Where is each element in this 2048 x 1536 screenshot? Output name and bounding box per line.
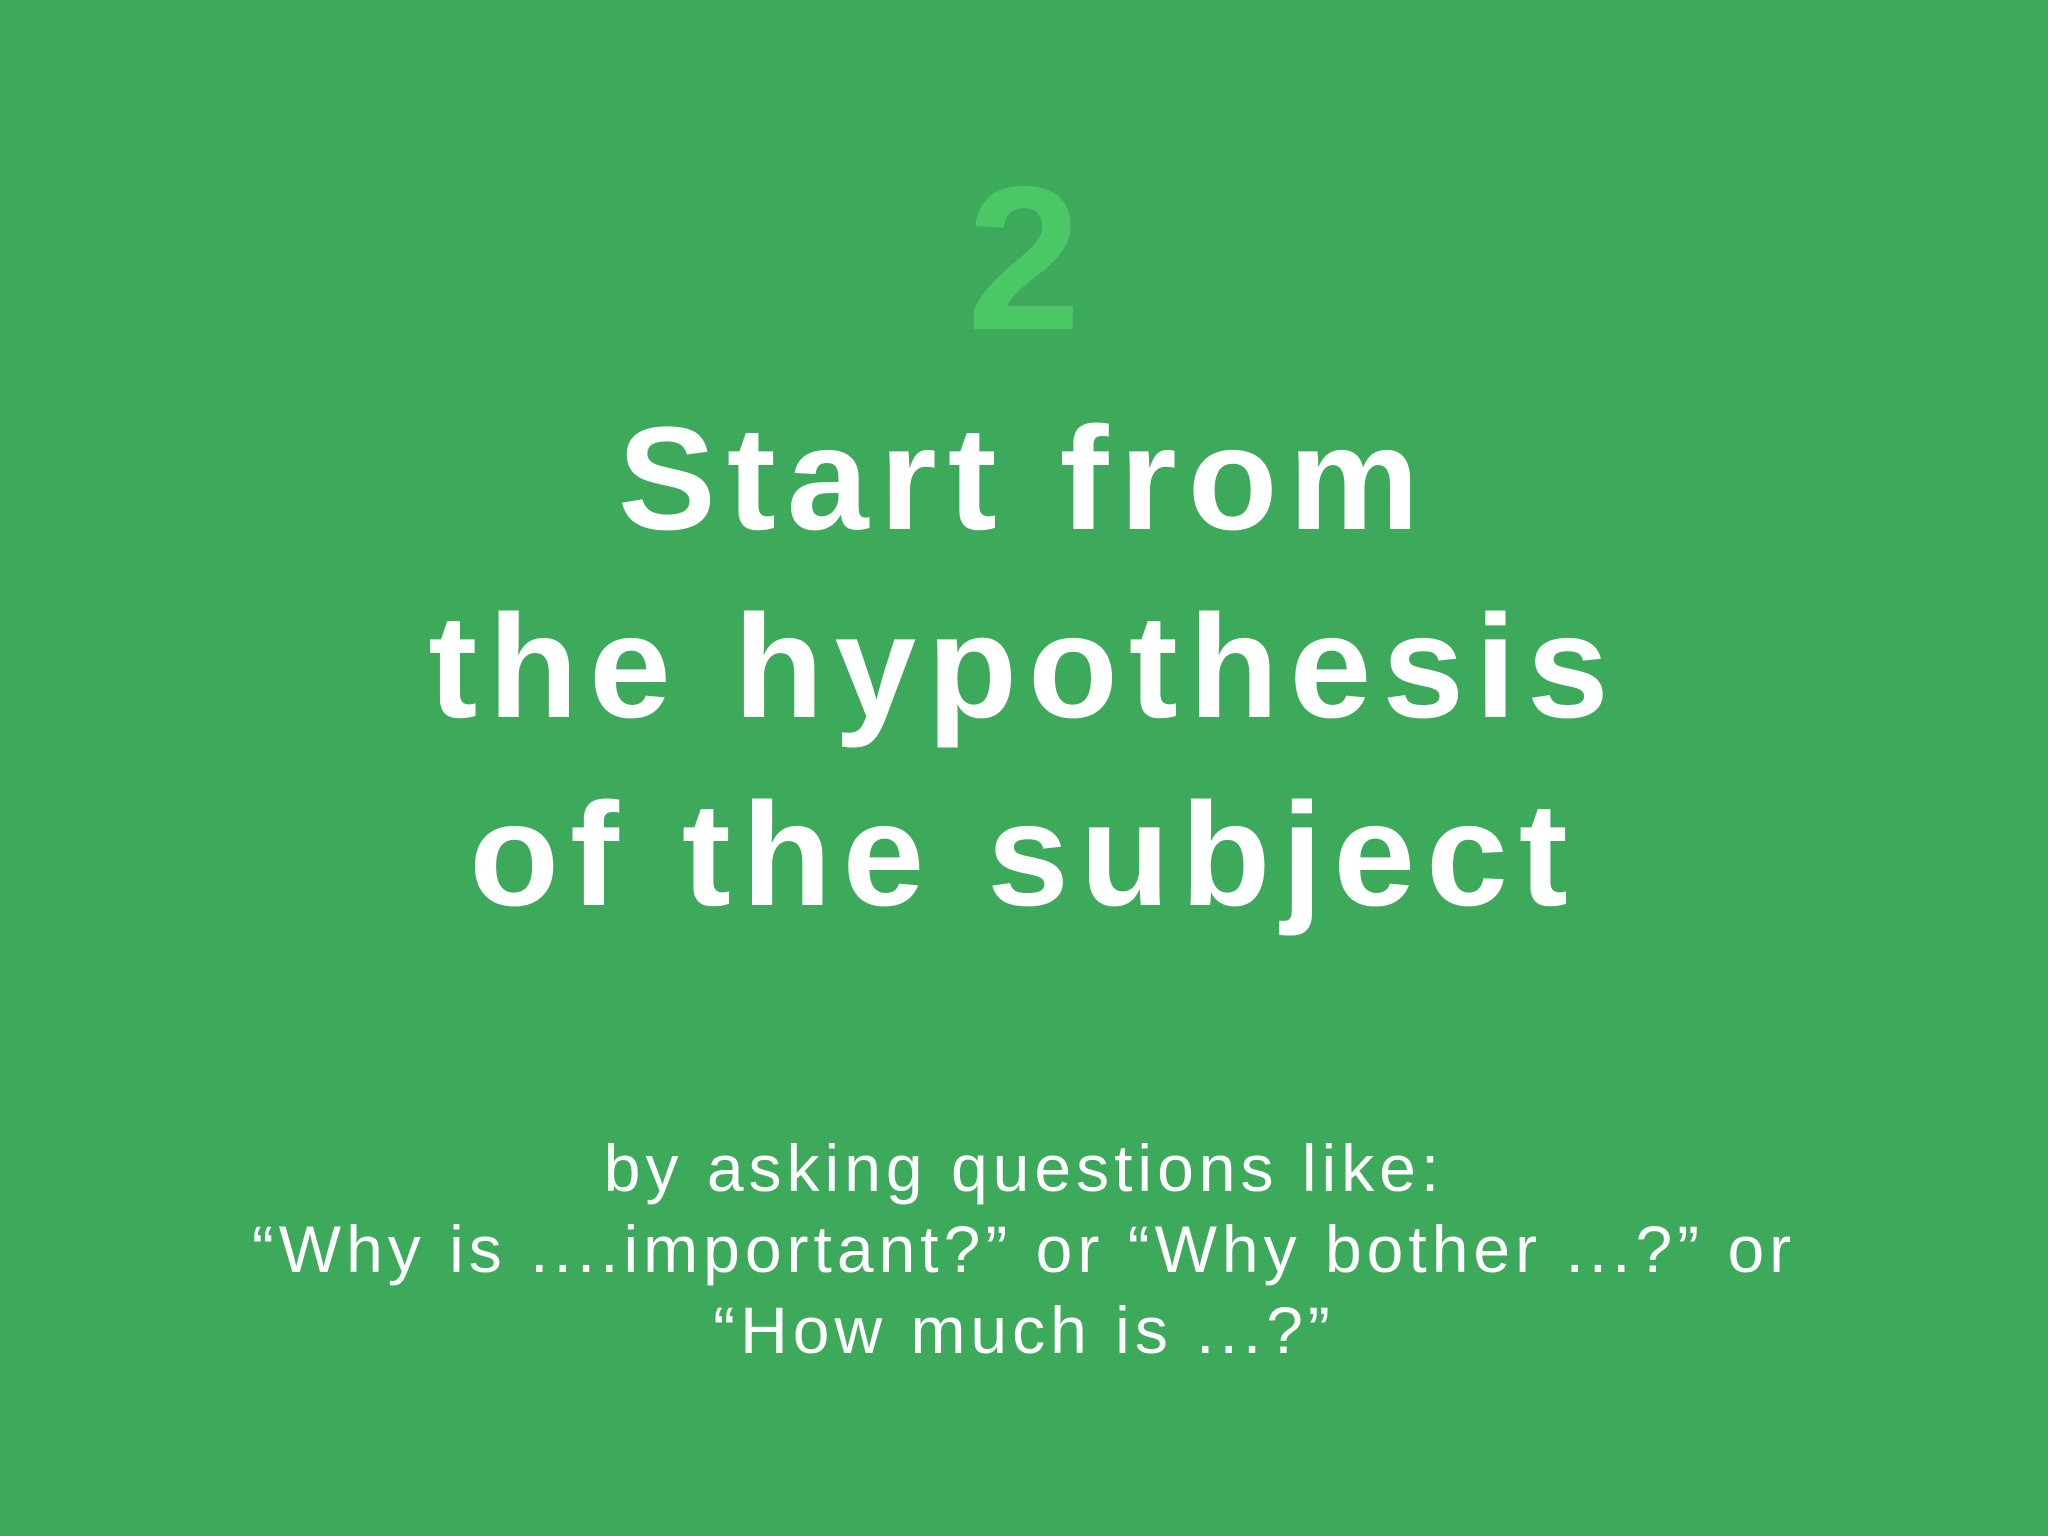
subtitle text: “How much is ...?” xyxy=(713,1293,1335,1367)
subtitle text: by asking questions like: xyxy=(604,1131,1444,1205)
subtitle text xyxy=(252,1131,1796,1367)
title: Start from xyxy=(618,397,1430,561)
title xyxy=(428,397,1620,937)
step number: 2 xyxy=(967,144,1081,373)
title: of the subject xyxy=(469,773,1579,937)
title: the hypothesis xyxy=(428,585,1620,749)
subtitle text: “Why is ....important?” or “Why bother ...?” or xyxy=(252,1212,1796,1286)
